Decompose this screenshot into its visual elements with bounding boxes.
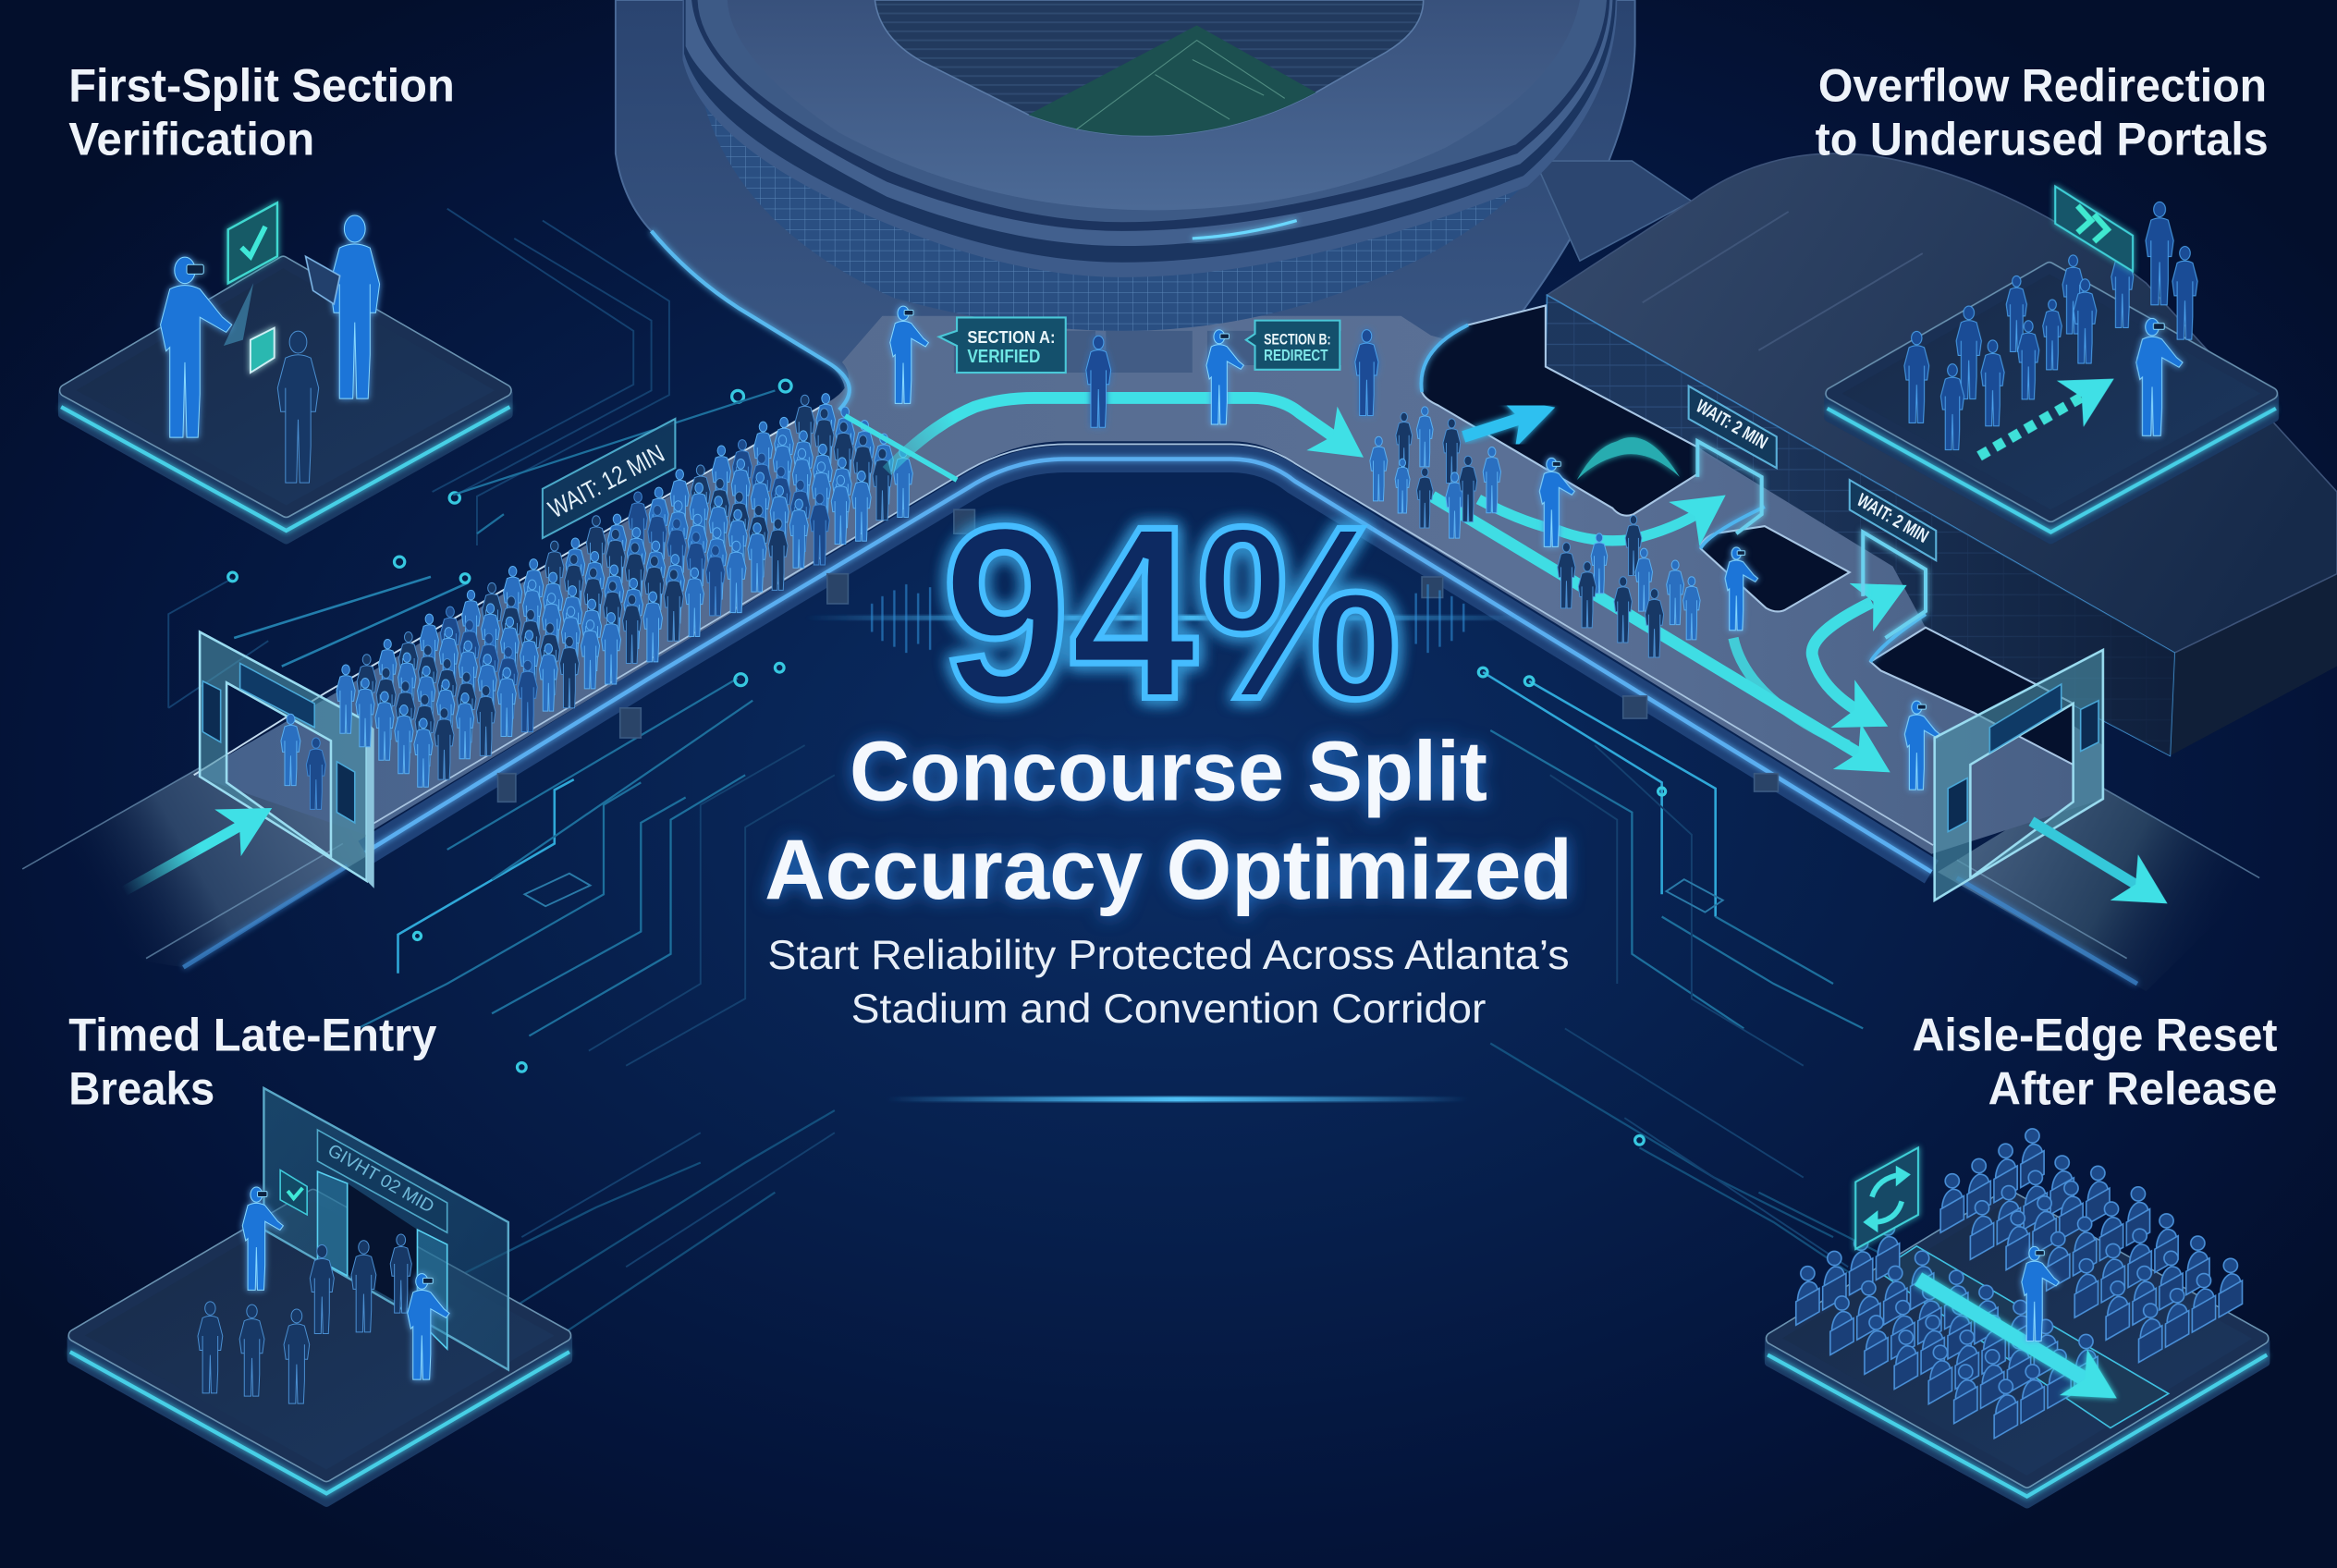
platform side <box>1829 397 2274 540</box>
label: aisle-edge reset <box>1912 1010 2278 1115</box>
attendee screen <box>251 328 275 373</box>
opening 1 <box>1421 305 1697 516</box>
platform side <box>63 394 508 540</box>
gate sign <box>240 663 314 728</box>
platform side <box>71 1339 568 1502</box>
portal 2 double arrow <box>1812 602 1872 718</box>
verifying staff right <box>330 215 380 398</box>
dark band <box>684 0 1616 263</box>
entry gate <box>200 632 374 888</box>
section a sign <box>939 317 1066 373</box>
plaza main arrow <box>887 398 1349 471</box>
check sign <box>228 202 277 283</box>
exit arrow <box>2031 821 2152 894</box>
label: first-split section verification: First-Split Section <box>68 60 455 112</box>
label: first-split section verification: Verification <box>68 114 314 165</box>
platform top <box>1772 1195 2262 1481</box>
exit gate <box>1935 650 2103 900</box>
section b sign: SECTION B: <box>1264 330 1331 348</box>
pitch <box>1028 25 1316 136</box>
walkway upper rail <box>194 406 823 775</box>
entry ramp <box>22 767 365 967</box>
connector bridge <box>1536 161 1692 261</box>
gate frame <box>200 632 367 881</box>
curved lower arrow <box>1733 638 1848 745</box>
seating bowl <box>875 0 1424 136</box>
reset icon <box>1855 1147 1918 1249</box>
directing staff <box>2136 318 2183 435</box>
staff tablet <box>306 256 340 304</box>
right arm crowd 1 <box>1370 407 1500 538</box>
long diagonal arrow <box>1432 496 1875 763</box>
subheading line 1: Start Reliability Protected Across Atlanta’s <box>767 933 1570 978</box>
walkway glowing rim <box>365 459 1931 872</box>
plaza flow arrows <box>845 398 1875 763</box>
pitch markings <box>1076 41 1285 129</box>
lower seating block <box>1796 1221 2098 1439</box>
big stat 94%: 94% <box>942 475 1401 750</box>
panel: timed late-entry breaks <box>70 1088 569 1502</box>
check card <box>280 1170 307 1215</box>
wait 2 min sign 1: WAIT: 2 MIN <box>1693 397 1771 453</box>
doorway <box>348 1183 417 1313</box>
walkway inner rail <box>370 444 1933 845</box>
label: timed late-entry breaks: Timed Late-Entry <box>68 1010 437 1061</box>
section b sign <box>1246 321 1340 370</box>
section b sign: REDIRECT <box>1264 346 1328 364</box>
platform rim <box>1831 268 2271 516</box>
swirl hologram <box>1577 437 1680 480</box>
gap band <box>691 0 1609 231</box>
second band <box>698 0 1607 222</box>
attendee with tablet <box>277 331 319 483</box>
roof highlight <box>1193 221 1297 239</box>
dashed flow arrow <box>1979 387 2098 456</box>
panel: overflow redirection <box>1828 187 2276 540</box>
platform glow edge <box>1768 1354 2267 1497</box>
stadium <box>682 0 1617 373</box>
label: overflow redirection: to Underused Portals <box>1816 114 2269 165</box>
platform rim <box>75 1195 565 1476</box>
aisle arrow <box>1918 1279 2101 1390</box>
window band <box>701 0 1602 331</box>
exit gate sign <box>1989 684 2062 753</box>
verifying staff left <box>161 257 232 437</box>
platform top <box>66 263 506 511</box>
stadium outer deck <box>616 0 1635 410</box>
label: timed late-entry breaks <box>68 1010 437 1115</box>
platform glow edge <box>61 407 509 531</box>
headline line 2: Accuracy Optimized <box>765 823 1572 917</box>
usher <box>2022 1246 2059 1341</box>
facade shade <box>1546 295 2174 755</box>
queue crowd <box>336 394 912 787</box>
platform top <box>75 1195 565 1476</box>
ledge band <box>682 0 1617 277</box>
waiting group <box>1904 202 2197 450</box>
platform glow edge <box>1828 409 2276 533</box>
gate pillar <box>367 721 374 888</box>
tablet beam <box>224 283 253 346</box>
gate staff <box>242 1187 449 1379</box>
center pulse line <box>805 584 1536 653</box>
headline line 1: Concourse Split <box>850 725 1487 819</box>
wait 2 min sign 2: WAIT: 2 MIN <box>1854 490 1932 547</box>
building side facade <box>2170 574 2337 755</box>
aisle <box>1878 1246 2169 1427</box>
platform rim <box>66 263 506 511</box>
label: overflow redirection <box>1816 60 2269 165</box>
overflow arrow <box>1463 413 1538 436</box>
walkway surface <box>194 316 2103 854</box>
exit gate screens <box>1948 701 2098 832</box>
roof seams <box>1643 212 1923 350</box>
subheading line 2: Stadium and Convention Corridor <box>851 986 1487 1032</box>
exit ramp <box>1938 779 2259 991</box>
third band <box>686 0 1612 246</box>
gate figures <box>281 714 325 809</box>
timer sign <box>317 1130 447 1232</box>
ground floor doors <box>954 331 1341 373</box>
guides on right arm <box>1539 458 1939 790</box>
gate side screens <box>202 681 355 823</box>
convention building <box>1536 153 2337 755</box>
exit ramp rails <box>1957 779 2259 959</box>
platform glow edge <box>70 1352 569 1493</box>
panel: aisle-edge reset <box>1768 1129 2267 1504</box>
chevron sign <box>2055 187 2133 271</box>
portal 2 frame <box>1863 533 1926 638</box>
ramp rims <box>183 866 2137 984</box>
door posts <box>317 1171 447 1349</box>
portal 1 arrow <box>1478 499 1711 541</box>
wait 12 min sign: WAIT: 12 MIN <box>544 439 669 523</box>
glass wall <box>263 1088 508 1370</box>
panel: first-split section verification <box>61 202 509 540</box>
main roof <box>728 0 1580 210</box>
service openings <box>1421 305 2074 765</box>
upper seating block <box>1940 1129 2242 1363</box>
portal 1 frame <box>1697 441 1762 533</box>
section a sign: SECTION A: <box>967 327 1055 347</box>
section a sign: VERIFIED <box>967 347 1040 367</box>
opening 3 <box>1870 628 2074 765</box>
walkway supports <box>498 509 1778 802</box>
roof <box>1547 153 2337 653</box>
opening 2 <box>1701 526 1850 611</box>
entry ramp rails <box>22 767 343 959</box>
right arm crowd 2 <box>1558 516 1700 657</box>
label: timed late-entry breaks: Breaks <box>68 1063 214 1115</box>
center glow line <box>887 1097 1468 1101</box>
front facade <box>1546 295 2174 755</box>
label: aisle-edge reset: Aisle-Edge Reset <box>1912 1010 2278 1061</box>
opening rim glow <box>1421 325 1926 662</box>
label: aisle-edge reset: After Release <box>1988 1063 2277 1115</box>
platform side <box>1769 1341 2266 1504</box>
label: first-split section verification <box>68 60 455 165</box>
walkway rim side <box>365 459 1931 872</box>
exit gate frame <box>1935 650 2103 900</box>
platform top <box>1831 268 2271 516</box>
entry arrow <box>124 816 256 891</box>
crossing line <box>845 416 957 480</box>
deck edge glow <box>652 231 850 410</box>
label: overflow redirection: Overflow Redirection <box>1818 60 2267 112</box>
platform rim <box>1772 1195 2262 1481</box>
circuit traces <box>168 209 1878 1341</box>
waiting attendees <box>198 1234 411 1403</box>
timer sign: GIVHT 02 MID <box>324 1140 437 1218</box>
plaza staff <box>890 306 1378 427</box>
